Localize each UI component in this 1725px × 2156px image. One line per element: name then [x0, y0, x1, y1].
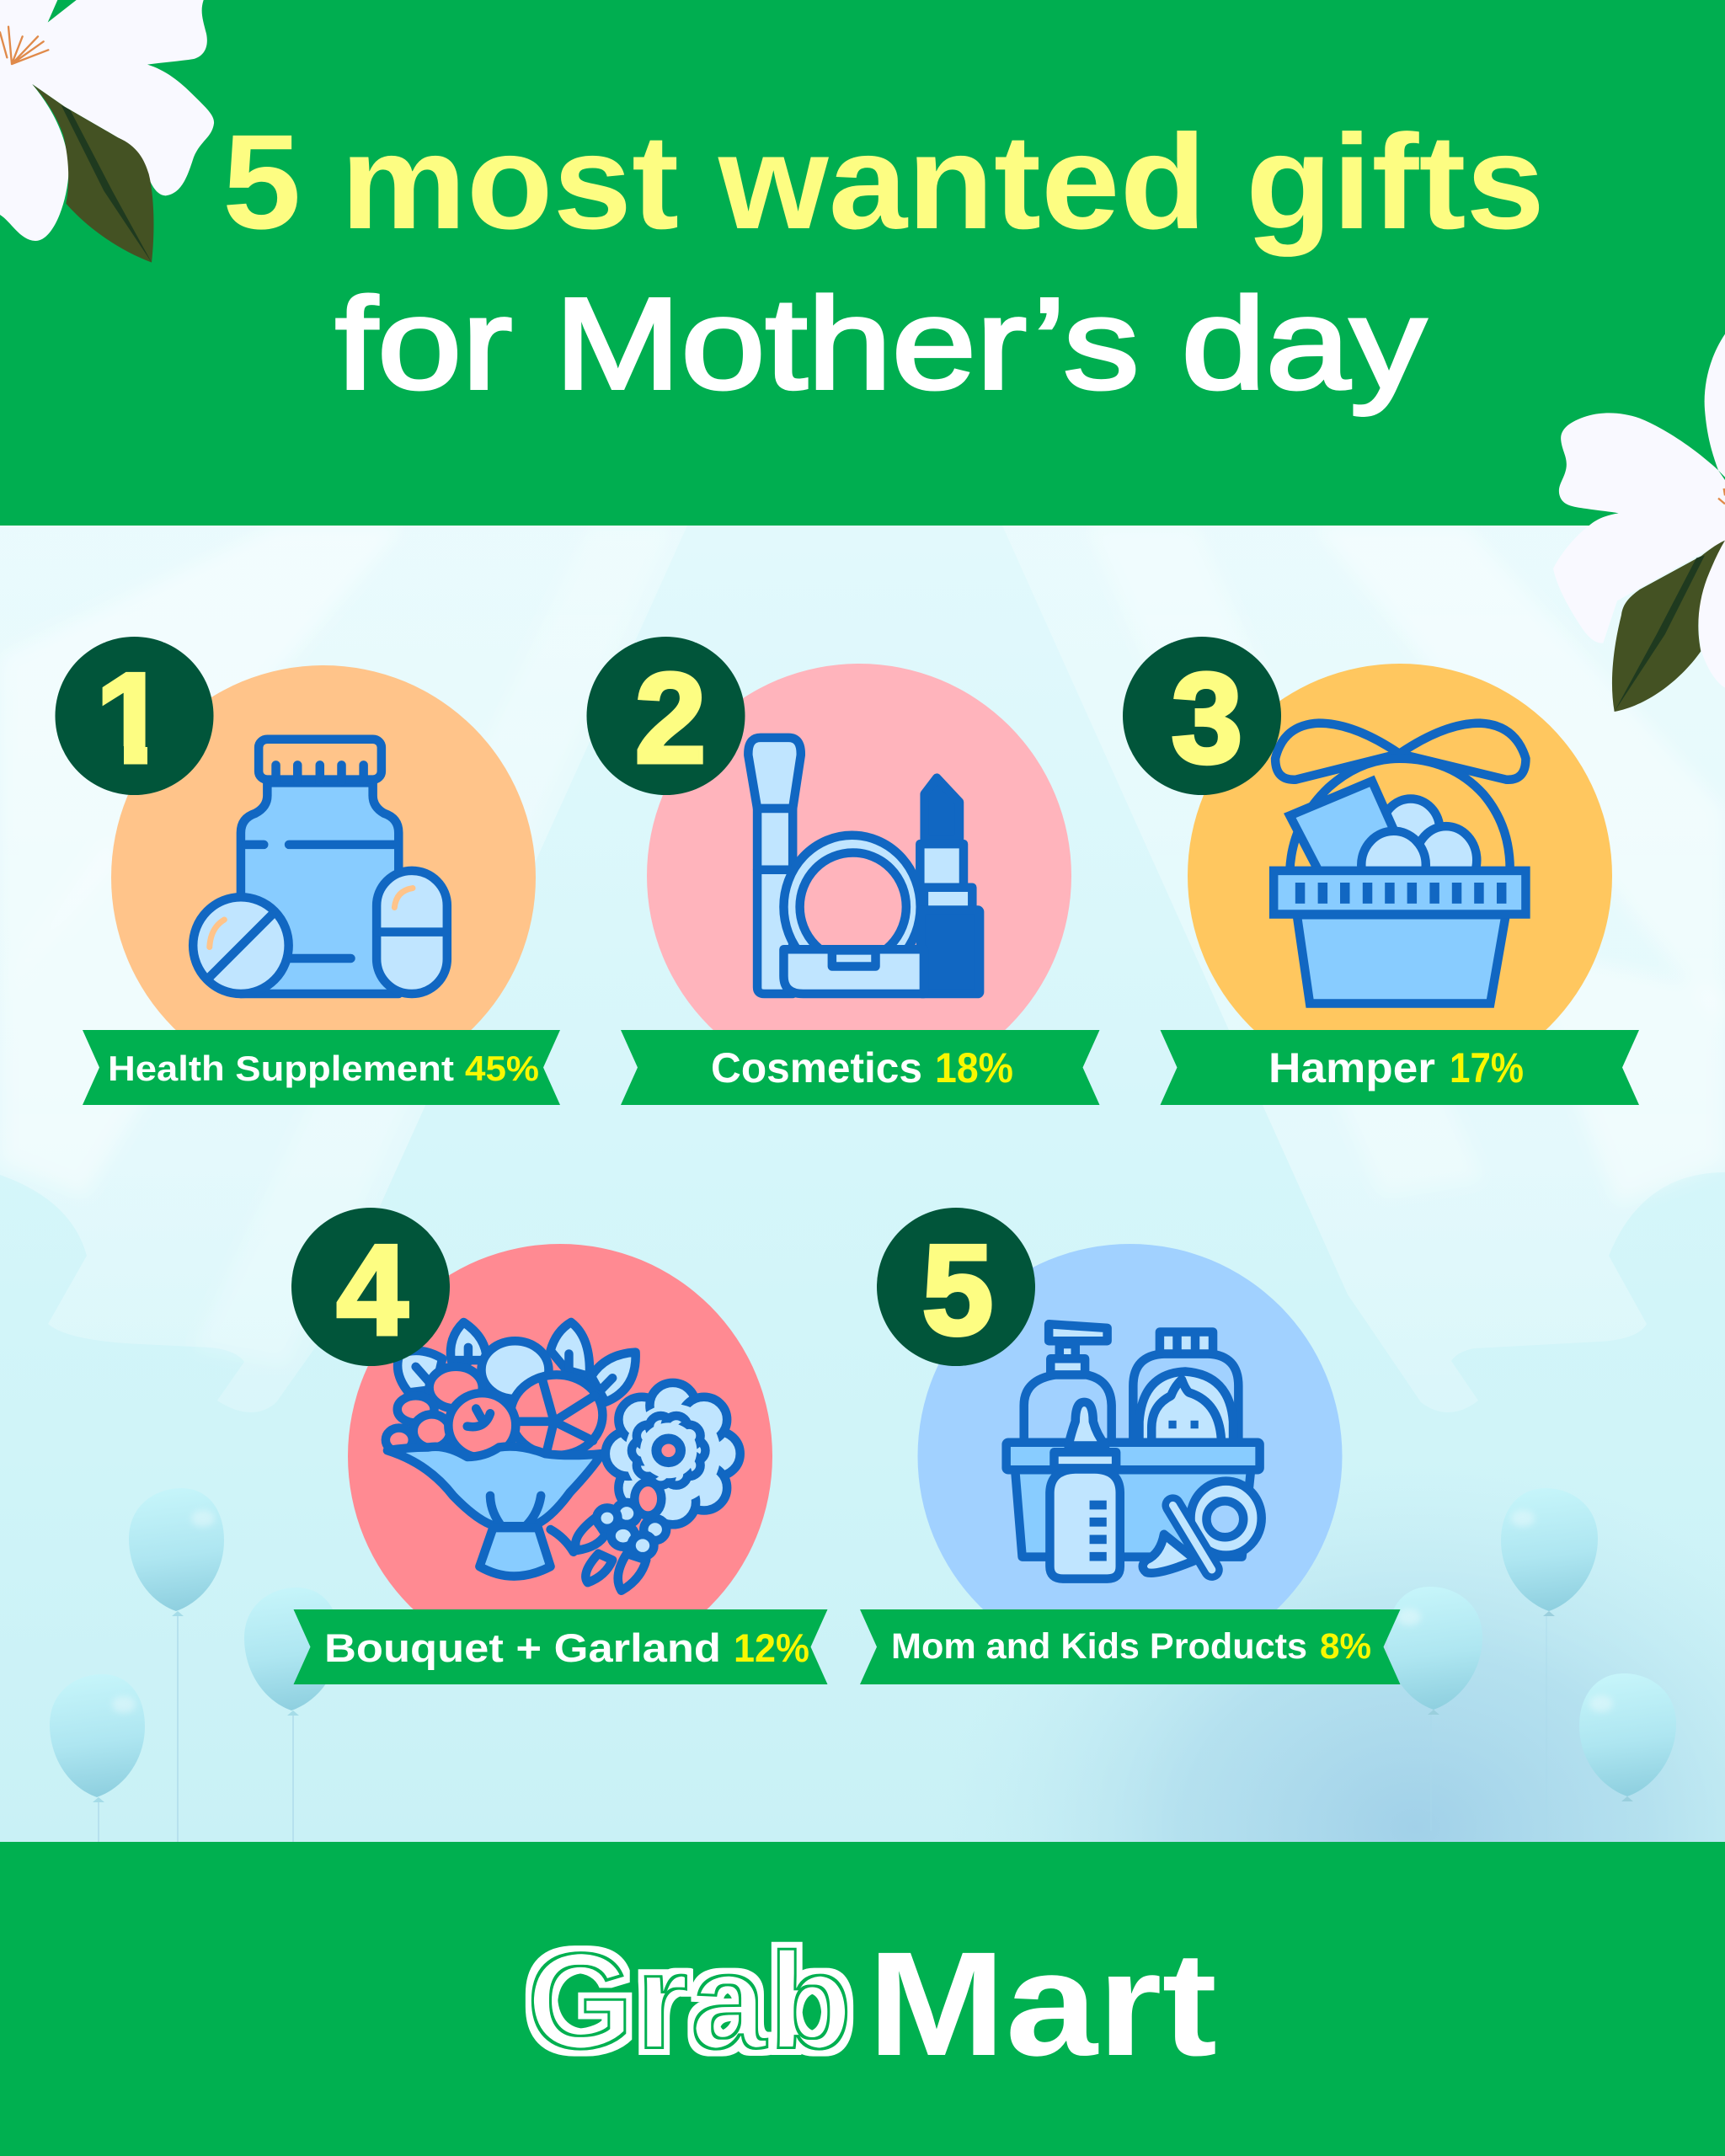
- icon: supplement bottle and pills: [193, 739, 447, 994]
- ribbon: hamper: Hamper: [1268, 1044, 1435, 1091]
- ribbon: mom and kids products: Mom and Kids Products: [891, 1626, 1307, 1667]
- logo word: Grab (inline style): Grab: [526, 1924, 853, 2079]
- logo: GrabMart: [526, 1922, 1217, 2087]
- flower: right: [1553, 334, 1725, 712]
- header band: [0, 0, 1725, 526]
- ribbon: bouquet and garland: [293, 1609, 827, 1684]
- item 2: cosmetics: [586, 637, 1100, 1105]
- title: [222, 106, 1545, 416]
- icon: bouquet and flower garland: [386, 1322, 740, 1591]
- item 5: mom and kids products: [860, 1208, 1400, 1684]
- badge: number 2: 2: [635, 647, 706, 790]
- item 1: health supplement: [56, 637, 560, 1105]
- balloon: left 1: [129, 1488, 224, 1842]
- badge: number 1: [56, 637, 214, 795]
- background panel: pale sky with curtains: [0, 526, 1725, 1842]
- ribbon: cosmetics: 18%: [935, 1044, 1013, 1091]
- circle: coral: [348, 1244, 772, 1668]
- balloon: right 1: [1501, 1488, 1598, 1842]
- ribbon: bouquet and garland: 12%: [734, 1625, 809, 1670]
- footer band: [0, 1842, 1725, 2156]
- ribbon: bouquet and garland: Bouquet + Garland: [324, 1625, 721, 1670]
- ribbon: cosmetics: Cosmetics: [711, 1044, 922, 1091]
- ribbon: mom and kids products: [860, 1609, 1400, 1684]
- icon: baby products in a tub: [1007, 1324, 1262, 1579]
- right curtain: [1002, 526, 1725, 1412]
- badge: number 3: [1123, 637, 1281, 795]
- badge: number 4: [291, 1208, 450, 1366]
- badge: number 5: [877, 1208, 1035, 1366]
- balloon: left 3: [50, 1674, 145, 1842]
- item 3: hamper: [1123, 637, 1639, 1105]
- ribbon: health supplement: 45%: [465, 1049, 539, 1088]
- balloons: [50, 1488, 1676, 1842]
- circle: blue: [918, 1244, 1343, 1668]
- ribbon: hamper: 17%: [1450, 1044, 1524, 1091]
- circle: peach: [111, 665, 536, 1090]
- balloon: left 2: [244, 1588, 339, 1842]
- ribbon: cosmetics: [621, 1030, 1100, 1105]
- badge: number 2: [586, 637, 745, 795]
- badge: number 5: 5: [922, 1219, 993, 1362]
- balloon: right 2: [1387, 1587, 1482, 1831]
- ribbon: mom and kids products: 8%: [1320, 1626, 1371, 1667]
- title line 1: 5 most wanted gifts: [222, 106, 1545, 257]
- circle: amber: [1188, 664, 1612, 1088]
- ribbon: health supplement: Health Supplement: [108, 1049, 454, 1088]
- circle: pink: [647, 664, 1071, 1088]
- flower: top left: [0, 0, 214, 263]
- badge: number 4: 4: [337, 1219, 408, 1362]
- logo word: Mart: Mart: [868, 1922, 1217, 2087]
- icon: brush, compact and lipstick: [748, 738, 980, 994]
- balloon: right 3: [1579, 1673, 1676, 1801]
- item 4: bouquet and garland: [291, 1208, 827, 1684]
- title line 2: for Mother’s day: [335, 271, 1426, 416]
- icon: gift basket with bow: [1274, 723, 1525, 1004]
- badge: number 1: 1: [96, 647, 167, 790]
- ribbon: hamper: [1161, 1030, 1639, 1105]
- ribbon: health supplement: [83, 1030, 560, 1105]
- left curtain: [0, 526, 687, 1412]
- badge: number 3: 3: [1172, 647, 1242, 790]
